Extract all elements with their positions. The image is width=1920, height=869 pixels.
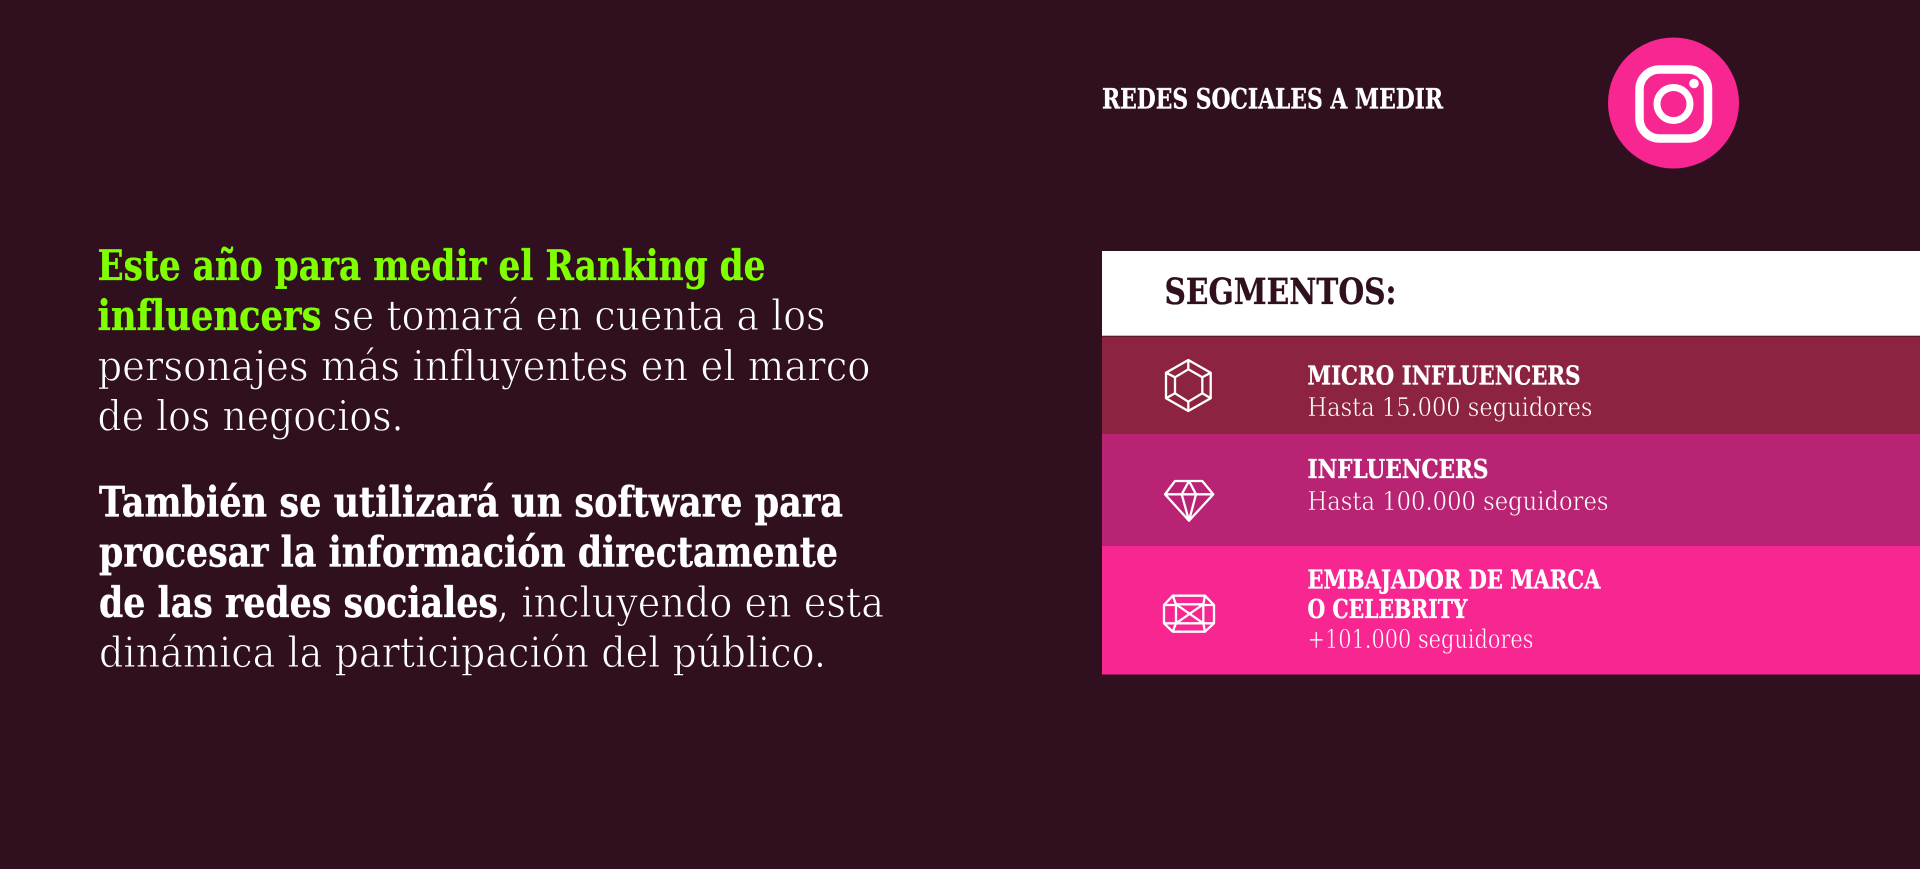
text block: software paragraph: , incluyendo en esta xyxy=(497,578,884,627)
label: hasta 100.000 seguidores: Hasta 100.000 seguidores xyxy=(1308,487,1608,517)
text block: software paragraph xyxy=(99,478,884,677)
label: hasta 15.000 seguidores: Hasta 15.000 seguidores xyxy=(1308,393,1592,423)
text block: intro paragraph: de los negocios. xyxy=(98,392,404,440)
panel: segmentos xyxy=(1102,251,1920,674)
row: influencers xyxy=(1102,434,1920,546)
text block: intro paragraph: influencers xyxy=(98,291,322,340)
label: embajador de marca o celebrity xyxy=(1308,566,1601,625)
panel header: segmentos: SEGMENTOS: xyxy=(1164,271,1396,313)
text block: software paragraph: También se utilizará un software para xyxy=(99,478,843,526)
label: embajador de marca o celebrity: O CELEBRITY xyxy=(1308,595,1468,625)
panel header: segmentos xyxy=(1102,251,1920,336)
text block: software paragraph: dinámica la participación del público. xyxy=(99,628,826,677)
label: influencers: INFLUENCERS xyxy=(1308,455,1488,485)
icon: emerald gem xyxy=(1164,596,1214,632)
label: micro influencers: MICRO INFLUENCERS xyxy=(1308,362,1580,392)
icon: instagram xyxy=(1608,38,1739,168)
text block: software paragraph: procesar la información directamente xyxy=(99,528,838,576)
row: embajador de marca xyxy=(1102,546,1920,674)
row: micro influencers xyxy=(1102,336,1920,434)
label: embajador de marca o celebrity: EMBAJADOR DE MARCA xyxy=(1308,566,1601,596)
icon: diamond xyxy=(1165,481,1213,521)
text block: intro paragraph: se tomará en cuenta a los xyxy=(332,291,826,340)
icon: hexagon gem xyxy=(1166,360,1211,411)
text block: intro paragraph xyxy=(98,241,870,440)
text block: intro paragraph: personajes más influyentes en el marco xyxy=(98,342,870,390)
text block: software paragraph: de las redes sociales xyxy=(99,578,498,627)
label: +101.000 seguidores: +101.000 seguidores xyxy=(1308,625,1534,655)
heading: redes sociales a medir: REDES SOCIALES A MEDIR xyxy=(1102,82,1444,116)
text block: intro paragraph: Este año para medir el Ranking de xyxy=(98,241,766,290)
